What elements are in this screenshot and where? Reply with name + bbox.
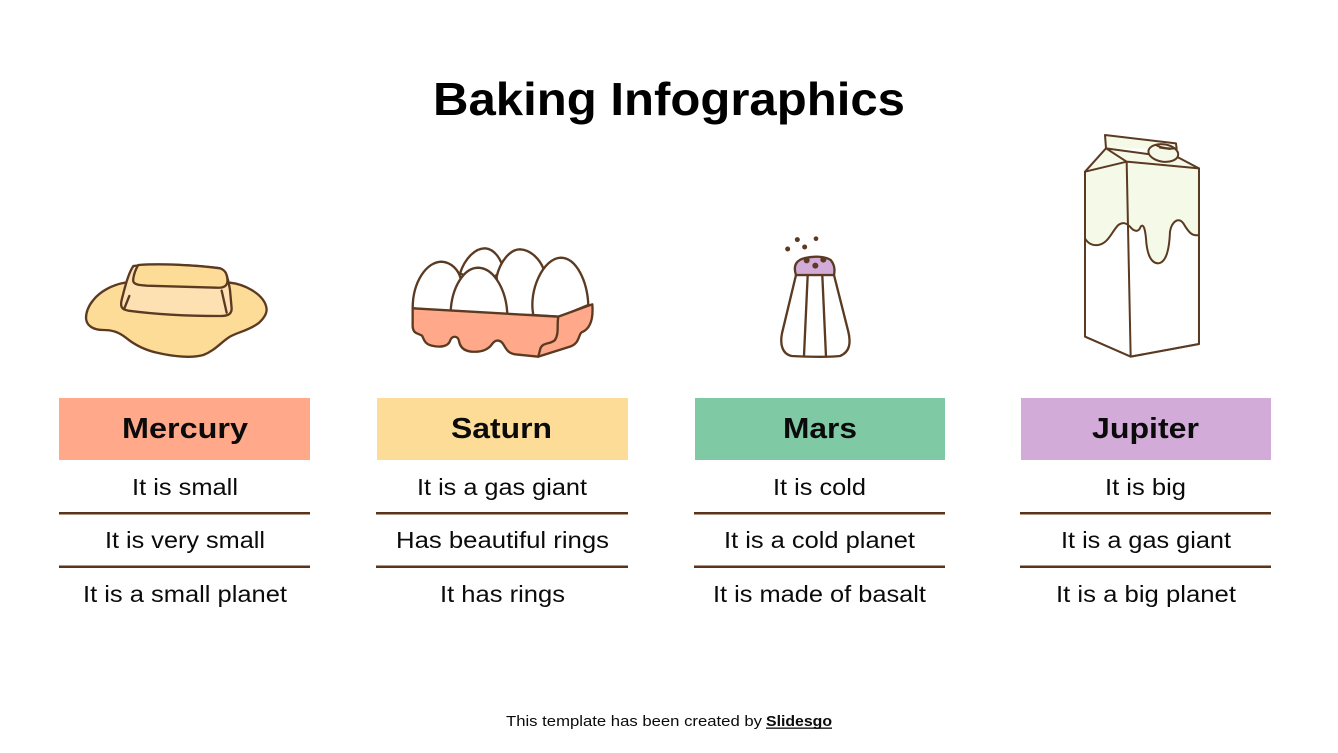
text: Mercury facts: It is small: [132, 474, 238, 500]
panel: Mars: [694, 398, 945, 607]
pepper dots: [785, 236, 826, 269]
footer credit: This template has been created by: [506, 713, 763, 730]
icon: butter: [86, 264, 267, 357]
text: Saturn facts: [376, 474, 628, 607]
text: Jupiter facts: [1020, 474, 1271, 607]
icon: salt shaker: [781, 236, 850, 357]
panel: Mercury: [59, 398, 310, 607]
heading: Jupiter: [1021, 398, 1271, 460]
heading: Mars: Mars: [783, 413, 857, 445]
heading: Mercury: [59, 398, 310, 460]
panel: Saturn: [376, 398, 628, 607]
heading: Mercury: Mercury: [122, 413, 248, 445]
title: Baking Infographics: [433, 73, 905, 125]
heading: Mars: [695, 398, 945, 460]
heading: Jupiter: Jupiter: [1092, 413, 1199, 445]
footer credit: Slidesgo: [766, 713, 832, 730]
text: Mars facts: [694, 474, 945, 607]
text: Saturn facts: It has rings: [440, 581, 565, 607]
text: Jupiter facts: It is big: [1105, 474, 1186, 500]
text: Mars facts: It is made of basalt: [713, 581, 926, 607]
heading: Saturn: [377, 398, 628, 460]
panel: Jupiter: [1020, 398, 1271, 607]
text: Saturn facts: It is a gas giant: [417, 474, 587, 500]
text: Mercury facts: [59, 474, 310, 607]
icon: eggs in carton: [413, 248, 593, 357]
text: Mercury facts: It is very small: [105, 527, 265, 553]
text: Mercury facts: It is a small planet: [83, 581, 287, 607]
text: Saturn facts: Has beautiful rings: [396, 527, 609, 553]
text: Jupiter facts: It is a big planet: [1056, 581, 1237, 607]
text: Mars facts: It is cold: [773, 474, 866, 500]
heading: Saturn: Saturn: [451, 413, 552, 445]
icon: milk carton: [1085, 135, 1199, 357]
text: Jupiter facts: It is a gas giant: [1061, 527, 1231, 553]
text: Mars facts: It is a cold planet: [724, 527, 916, 553]
